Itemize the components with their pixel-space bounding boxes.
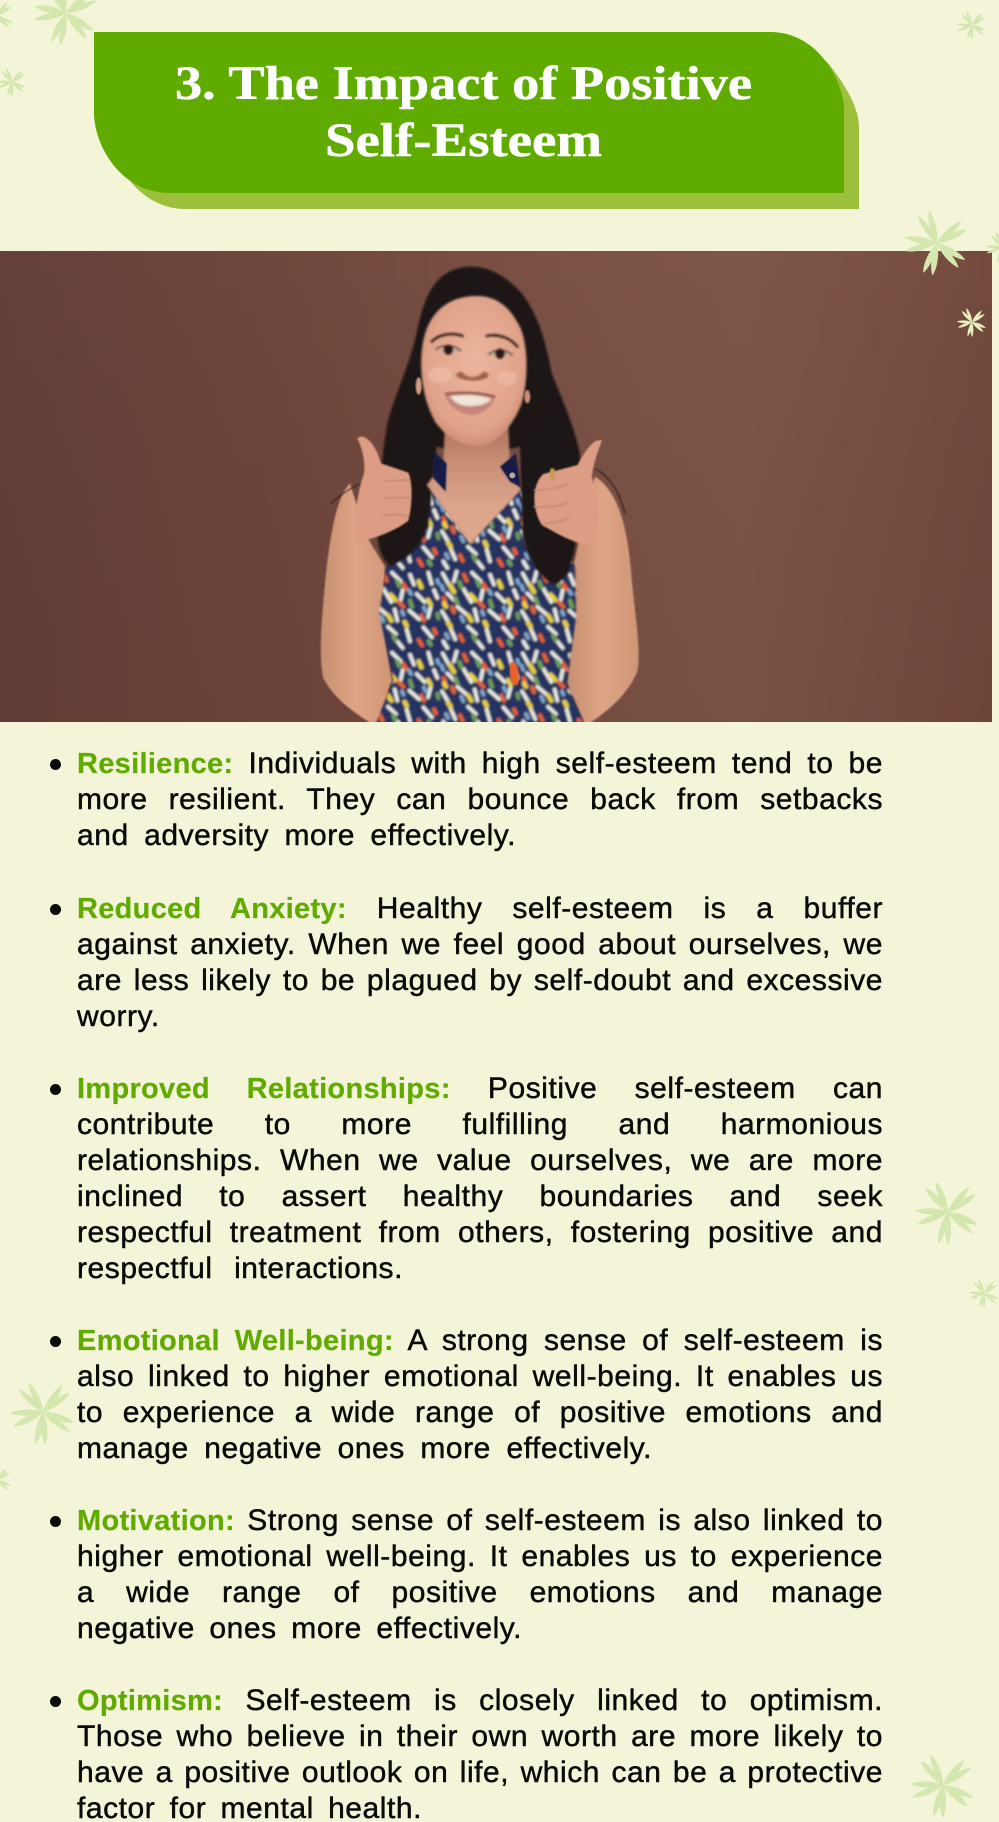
flower: left lower xyxy=(8,1378,77,1447)
bullet: Improved Relationships: inclined to assert healthy boundaries and seek xyxy=(77,1180,883,1212)
bullet: Optimism: have a positive outlook on life, which can be a protective xyxy=(77,1756,883,1788)
flower: right small xyxy=(969,1278,999,1308)
bullet: Reduced Anxiety: Reduced Anxiety: Healthy self-esteem is a buffer xyxy=(77,892,883,924)
bullet: Optimism xyxy=(50,1684,883,1822)
facial features xyxy=(429,334,517,415)
flower: right edge partial xyxy=(985,231,999,264)
right thumbs-up fist xyxy=(533,440,602,546)
bullet: Resilience: and adversity more effectively. xyxy=(77,819,516,852)
title text: 3. The Impact of Positive xyxy=(175,57,752,110)
collar xyxy=(433,452,521,492)
bullet: Emotional Well-being: Emotional Well-being: A strong sense of self-esteem is xyxy=(77,1324,883,1356)
bullet: Reduced Anxiety: against anxiety. When we feel good about ourselves, we xyxy=(77,928,883,960)
flower: right middle xyxy=(915,1180,980,1245)
bullet: Motivation xyxy=(50,1504,883,1644)
bullet: Improved Relationships: Improved Relationships: Positive self-esteem can xyxy=(77,1072,883,1104)
flower: above photo right xyxy=(900,207,973,280)
flower: top-left large xyxy=(28,0,103,51)
bullet: Motivation: higher emotional well-being. It enables us to experience xyxy=(77,1540,883,1572)
banner shadow xyxy=(115,42,859,209)
bullet: Emotional Well-being: manage negative ones more effectively. xyxy=(77,1432,652,1464)
bullet: Resilience: Resilience: Individuals with high self-esteem tend to be xyxy=(77,747,883,780)
figure of the woman xyxy=(321,267,639,727)
bullet: Improved Relationships xyxy=(50,1072,883,1284)
bullet: Improved Relationships: respectful interactions. xyxy=(77,1252,403,1284)
title banner xyxy=(94,32,859,209)
flower: left small xyxy=(0,67,27,97)
left thumbs-up fist xyxy=(355,437,412,543)
banner body xyxy=(94,32,844,193)
bullet: Resilience xyxy=(50,747,883,852)
ears xyxy=(416,377,422,395)
bullet: Reduced Anxiety xyxy=(50,892,883,1032)
flower: left edge partial xyxy=(0,1465,12,1495)
orange accent on dress xyxy=(510,662,519,685)
bullet: Motivation: negative ones more effectively. xyxy=(77,1612,522,1644)
bullet: Improved Relationships: contribute to more fulfilling and harmonious xyxy=(77,1108,883,1140)
bullet: Improved Relationships: relationships. When we value ourselves, we are more xyxy=(77,1144,883,1176)
photo: smiling woman giving two thumbs up xyxy=(0,251,992,722)
title text xyxy=(175,57,752,167)
flower: on photo right xyxy=(957,307,987,337)
flower: bottom right xyxy=(910,1753,975,1818)
bullet: Motivation: Motivation: Strong sense of self-esteem is also linked to xyxy=(77,1504,883,1536)
bullet: Emotional Well-being xyxy=(50,1324,883,1464)
arms xyxy=(321,477,639,727)
bullet: Emotional Well-being: also linked to higher emotional well-being. It enables us xyxy=(77,1360,883,1392)
hair xyxy=(377,267,582,584)
flower: top-left edge xyxy=(0,0,13,34)
neck and chest xyxy=(427,420,521,544)
bullet: Motivation: a wide range of positive emotions and manage xyxy=(77,1576,883,1608)
hair wisps xyxy=(331,468,625,513)
dress xyxy=(375,483,586,727)
bullet: Emotional Well-being: to experience a wide range of positive emotions and xyxy=(77,1396,883,1428)
bullet: Resilience: more resilient. They can bounce back from setbacks xyxy=(77,783,883,816)
bullet: Reduced Anxiety: are less likely to be plagued by self-doubt and excessive xyxy=(77,964,883,996)
bullet: Reduced Anxiety: worry. xyxy=(77,1000,160,1032)
bullet: Optimism: Optimism: Self-esteem is closely linked to optimism. xyxy=(77,1684,883,1716)
face xyxy=(421,296,527,446)
bullet: Optimism: Those who believe in their own worth are more likely to xyxy=(77,1720,883,1752)
title text: Self-Esteem xyxy=(325,114,602,167)
flower: top-right small xyxy=(957,10,987,40)
bullet: Improved Relationships: respectful treatment from others, fostering positive and xyxy=(77,1216,883,1248)
